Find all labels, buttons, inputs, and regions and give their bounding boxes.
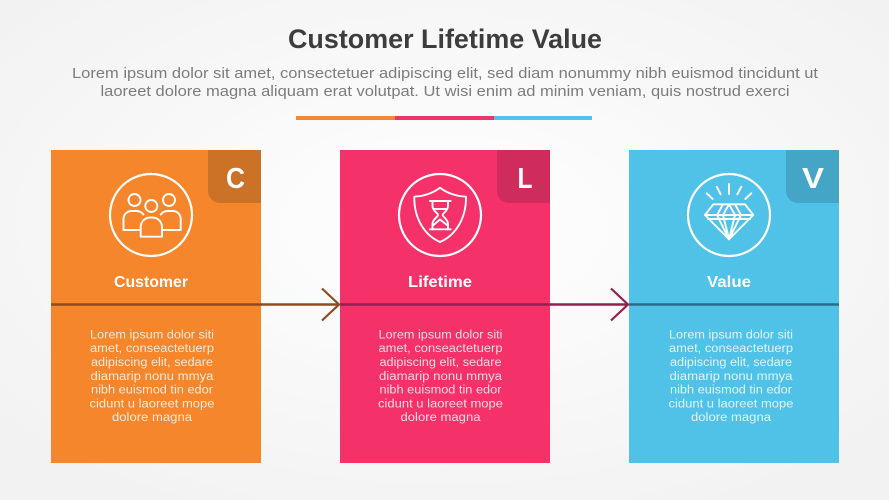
letter tab: V: V	[802, 163, 825, 195]
text block: customer: Lorem ipsum dolor siti	[90, 330, 214, 342]
text block: lifetime: nibh euismod tin edor	[380, 384, 502, 396]
text block: customer: dolore magna	[112, 412, 193, 424]
text block: value: amet, conseactetuerp	[669, 343, 793, 355]
text block: customer: adipiscing elit, sedare	[91, 357, 213, 369]
heading: lifetime: Lifetime	[408, 274, 472, 291]
text block: lifetime	[378, 330, 503, 424]
text block: lifetime: adipiscing elit, sedare	[380, 357, 502, 369]
text block: lifetime: diamarip nonu mmya	[379, 371, 503, 383]
text block: customer: nibh euismod tin edor	[91, 384, 213, 396]
text block: value: nibh euismod tin edor	[670, 384, 792, 396]
letter tab: L	[497, 150, 550, 203]
line: value end	[629, 303, 839, 306]
text block: lifetime: Lorem ipsum dolor siti	[378, 330, 502, 342]
subtitle text: Lorem ipsum dolor sit amet, consectetuer adipiscing elit, sed diam nonummy nibh euismod tincidunt ut	[72, 65, 819, 82]
text block: value: Lorem ipsum dolor siti	[669, 330, 793, 342]
icon: diamond with rays	[688, 174, 770, 256]
letter tab: C: C	[226, 163, 245, 195]
text block: lifetime: cidunt u laoreet mope	[378, 398, 503, 410]
text block: value	[668, 330, 794, 424]
title: Customer Lifetime Value	[288, 24, 602, 54]
text block: customer	[90, 330, 214, 424]
letter tab: L: L	[518, 163, 532, 195]
text block: lifetime: dolore magna	[400, 412, 481, 424]
text block: lifetime: amet, conseactetuerp	[378, 343, 502, 355]
arrow: lifetime to value	[340, 288, 628, 320]
letter tab: V	[786, 150, 839, 203]
subtitle text	[72, 65, 819, 100]
letter tab: C	[208, 150, 261, 203]
text block: customer: amet, conseactetuerp	[90, 343, 214, 355]
text block: customer: cidunt u laoreet mope	[90, 398, 214, 410]
panel: lifetime	[340, 150, 550, 463]
subtitle text: laoreet dolore magna aliquam erat volutpat. Ut wisi enim ad minim veniam, quis nostrud exerci	[100, 83, 790, 100]
text block: value: diamarip nonu mmya	[670, 371, 793, 383]
heading: value: Value	[707, 274, 751, 291]
panel: value	[629, 150, 839, 463]
heading: customer: Customer	[114, 274, 188, 291]
text block: customer: diamarip nonu mmya	[90, 371, 214, 383]
text block: value: adipiscing elit, sedare	[670, 357, 792, 369]
text block: value: cidunt u laoreet mope	[668, 398, 794, 410]
icon: customers group	[110, 174, 192, 256]
panel: customer	[51, 150, 261, 463]
text block: value: dolore magna	[691, 412, 772, 424]
icon: shield with hourglass	[399, 174, 481, 256]
arrow: customer to lifetime	[51, 288, 339, 320]
tricolor divider	[296, 116, 592, 120]
